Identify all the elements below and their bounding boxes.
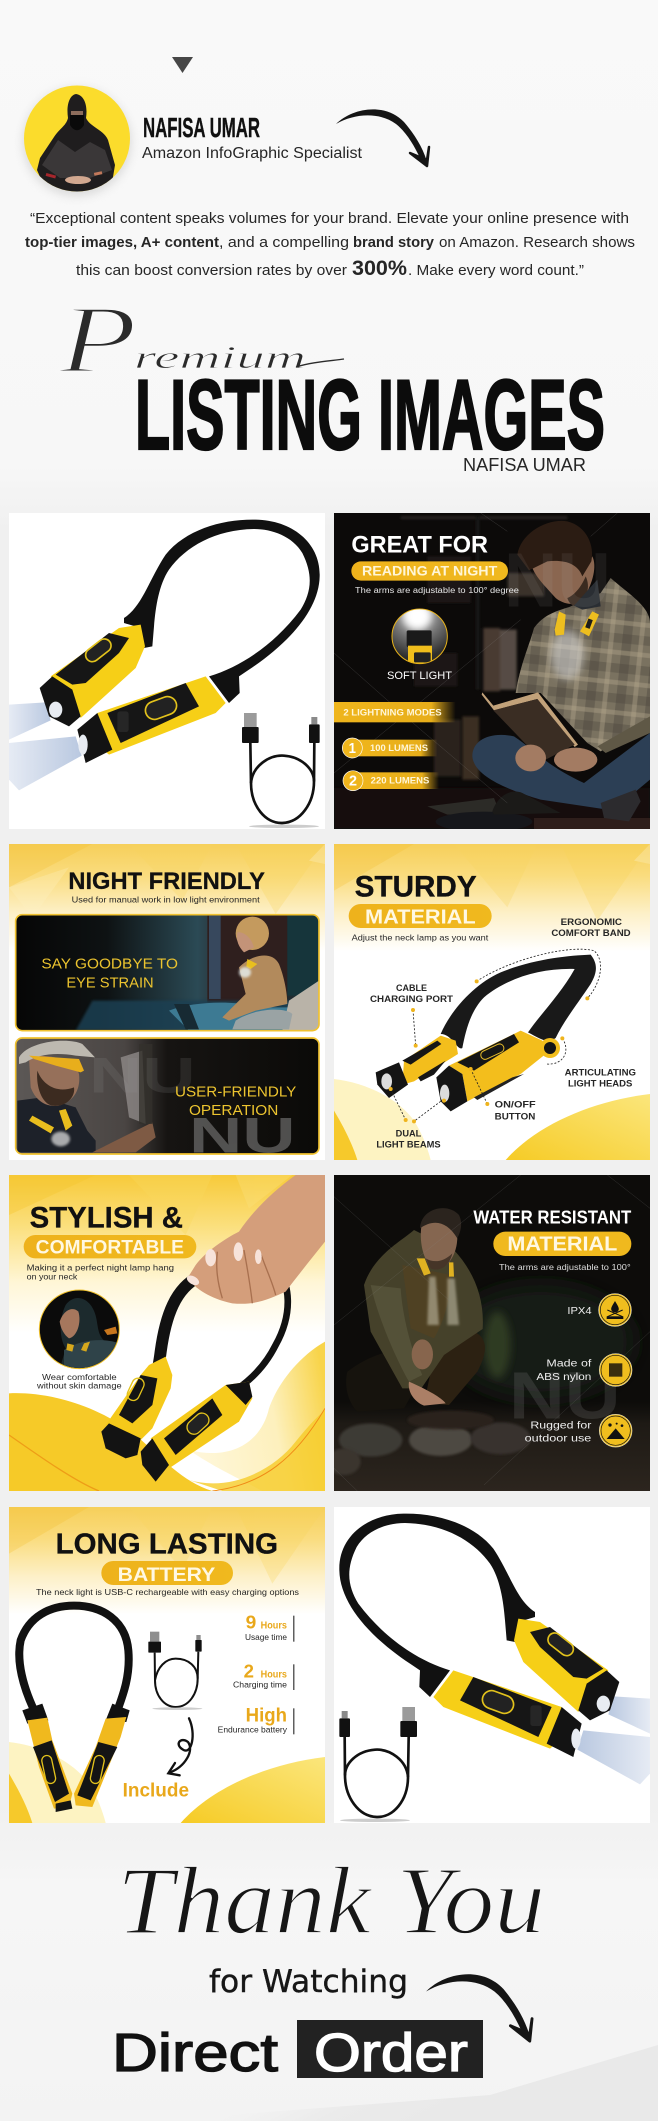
pill: battery xyxy=(101,1561,233,1586)
yellow waves xyxy=(9,1342,325,1491)
script heading: Thank You: Thank You xyxy=(117,1847,545,1954)
strip: lighting modes xyxy=(334,702,456,722)
neck lamp band xyxy=(156,1263,288,1390)
label: soft light: SOFT LIGHT xyxy=(387,670,452,682)
bottom waves xyxy=(334,1079,650,1160)
watermark: NU xyxy=(509,1359,621,1433)
neck lamp xyxy=(339,1514,619,1757)
panel: night friendly xyxy=(9,844,325,1163)
mode 1: 100 lumens xyxy=(342,738,437,758)
panel: product mirrored with cable xyxy=(334,1507,650,1823)
feature: ABS nylon: ABS nylon xyxy=(536,1372,591,1383)
panel: product with cable xyxy=(9,513,325,829)
mode 1: 100 lumens: 100 LUMENS xyxy=(370,743,428,753)
usb cable xyxy=(148,1632,202,1710)
quote paragraph: this can boost conversion rates by over xyxy=(76,262,347,279)
caption: Wear comfortable xyxy=(42,1372,117,1382)
man crouching xyxy=(346,1208,485,1412)
heading: GREAT FOR xyxy=(351,531,488,558)
hand xyxy=(187,1175,325,1304)
feature: rugged outdoor use: Rugged for xyxy=(530,1420,592,1431)
feature: IPX4: IPX4 xyxy=(567,1306,592,1317)
stat: high endurance battery: High xyxy=(246,1706,287,1727)
arrow: curved brush pointing to order xyxy=(426,1974,532,2041)
callout: articulating light heads: LIGHT HEADS xyxy=(568,1079,632,1089)
stat: 2 hours charging time: Hours xyxy=(261,1670,287,1681)
callout leader lines xyxy=(391,949,601,1121)
mode 1: 100 lumens: 1 xyxy=(349,741,356,757)
callout: ergonomic comfort band: ERGONOMIC xyxy=(561,917,623,927)
pill: material: MATERIAL xyxy=(507,1234,617,1256)
card: user-friendly operation: OPERATION xyxy=(189,1103,278,1119)
neck lamp xyxy=(376,955,596,1111)
card: say goodbye to eye strain: EYE STRAIN xyxy=(66,976,154,992)
subtitle: The neck light is USB-C rechargeable with easy charging options xyxy=(36,1587,299,1597)
panel: sturdy material xyxy=(334,844,650,1160)
text: for Watching: for Watching xyxy=(209,1964,408,2000)
callout: on/off button: BUTTON xyxy=(495,1111,535,1121)
stat: 2 hours charging time: Charging time xyxy=(233,1679,287,1689)
feature: ABS nylon: Made of xyxy=(546,1359,592,1370)
pill: material xyxy=(349,904,492,928)
callout: cable charging port: CHARGING PORT xyxy=(370,994,454,1004)
callout: on/off button xyxy=(495,1101,536,1120)
callout: dual light beams: LIGHT BEAMS xyxy=(376,1139,441,1149)
feature: rugged outdoor use: outdoor use xyxy=(525,1434,592,1445)
subtitle: The arms are adjustable to 100° degree xyxy=(355,586,520,595)
triangle marker xyxy=(172,57,193,73)
author avatar xyxy=(23,86,131,196)
rug floor xyxy=(334,788,650,832)
stat: 9 hours usage time: Usage time xyxy=(245,1632,287,1642)
feature: ABS nylon xyxy=(536,1354,632,1386)
mode 2: 220 lumens: 2 xyxy=(349,774,357,790)
quote paragraph: 300% xyxy=(352,257,407,280)
caption xyxy=(36,1372,122,1391)
bottom waves xyxy=(9,1742,325,1823)
panel: great for reading at night xyxy=(334,513,650,832)
light beams xyxy=(9,702,82,790)
card: user-friendly operation xyxy=(16,1038,319,1163)
quote paragraph: “Exceptional content speaks volumes for your brand. Elevate your online presence with xyxy=(30,210,629,227)
feature: rugged outdoor use xyxy=(525,1414,632,1447)
mode 2: 220 lumens: 220 LUMENS xyxy=(371,776,429,786)
quote paragraph: brand story xyxy=(353,234,435,251)
heading: STYLISH & xyxy=(30,1202,183,1235)
panel: long lasting battery xyxy=(9,1507,325,1823)
quote paragraph xyxy=(25,210,635,280)
subtitle: Used for manual work in low light environment xyxy=(72,895,260,905)
mode 2: 220 lumens xyxy=(343,771,439,791)
subtitle: The arms are adjustable to 100° xyxy=(499,1262,631,1272)
script title: Premium xyxy=(58,286,344,393)
heading: LONG LASTING xyxy=(56,1528,278,1560)
card: say goodbye to eye strain xyxy=(16,915,319,1031)
card: say goodbye to eye strain: SAY GOODBYE TO xyxy=(41,957,178,973)
text: Direct: Direct xyxy=(112,2023,278,2083)
subtitle xyxy=(27,1263,174,1281)
panel: stylish and comfortable xyxy=(9,1175,325,1491)
panel: water resistant material xyxy=(327,1175,650,1491)
callout: articulating light heads xyxy=(564,1069,636,1086)
script title: Premium: remium xyxy=(134,339,306,375)
card: user-friendly operation: USER-FRIENDLY xyxy=(175,1084,297,1100)
circle photo: woman wearing lamp xyxy=(39,1290,119,1372)
subtitle: Making it a perfect night lamp hang xyxy=(27,1263,174,1273)
author name: NAFISA UMAR xyxy=(143,112,260,143)
pill: comfortable: COMFORTABLE xyxy=(36,1237,184,1258)
heading: STURDY xyxy=(355,871,477,904)
stat: 9 hours usage time xyxy=(245,1611,294,1642)
pill: reading at night: READING AT NIGHT xyxy=(362,563,498,579)
quote paragraph: top-tier images, A+ content xyxy=(25,234,219,251)
neck lamp xyxy=(40,520,320,763)
callout: dual light beams: DUAL xyxy=(396,1128,422,1138)
usb cable xyxy=(339,1707,417,1822)
callout: dual light beams xyxy=(377,1130,440,1148)
neck lamp front view xyxy=(19,1606,130,1812)
heading: NIGHT FRIENDLY xyxy=(68,868,265,895)
author role: Amazon InfoGraphic Specialist xyxy=(142,145,363,162)
quote paragraph: on Amazon. Research shows xyxy=(439,234,635,251)
watermark: NU xyxy=(504,538,611,623)
stat: 9 hours usage time: Hours xyxy=(261,1620,287,1631)
stat: 9 hours usage time: 9 xyxy=(246,1611,256,1632)
neck lamp grips xyxy=(101,1357,252,1482)
arrow: curved brush pointing to text xyxy=(336,109,429,166)
callout: cable charging port xyxy=(370,984,453,1002)
byline: NAFISA UMAR xyxy=(463,454,586,475)
stat: high endurance battery xyxy=(218,1706,294,1735)
heading: WATER RESISTANT xyxy=(473,1206,632,1227)
caption: without skin damage xyxy=(36,1381,122,1391)
script title: Premium: P xyxy=(58,286,137,393)
card: user-friendly operation: NU xyxy=(189,1107,296,1163)
pill: battery: BATTERY xyxy=(118,1565,215,1586)
quote paragraph: , and a compelling xyxy=(219,234,349,251)
subtitle: Adjust the neck lamp as you want xyxy=(352,933,489,943)
label: include: Include xyxy=(123,1781,189,1802)
stat: 2 hours charging time xyxy=(233,1661,294,1690)
strip: lighting modes: 2 LIGHTNING MODES xyxy=(343,707,442,717)
card: user-friendly operation: NU xyxy=(89,1047,196,1103)
button: Order: Order xyxy=(314,2023,468,2083)
foliage and ground xyxy=(327,1285,650,1491)
feature: IPX4 xyxy=(567,1294,631,1326)
fingernails xyxy=(185,1242,262,1287)
callout: on/off button: ON/OFF xyxy=(495,1100,536,1110)
usb cable xyxy=(242,713,320,828)
callout: ergonomic comfort band xyxy=(552,918,630,936)
subtitle: on your neck xyxy=(27,1271,78,1281)
callout: articulating light heads: ARTICULATING xyxy=(565,1067,636,1077)
man reading xyxy=(472,521,650,821)
background bookshelf xyxy=(401,516,567,780)
arrow: curly arrow to include xyxy=(168,1718,193,1775)
stat: 2 hours charging time: 2 xyxy=(244,1661,254,1682)
pill: material xyxy=(493,1232,631,1256)
callout: ergonomic comfort band: COMFORT BAND xyxy=(551,928,631,938)
stat: high endurance battery: Endurance battery xyxy=(218,1725,288,1735)
quote paragraph: . Make every word count.” xyxy=(408,262,584,279)
pill: material: MATERIAL xyxy=(365,905,476,928)
callout: cable charging port: CABLE xyxy=(396,983,427,993)
icon: soft light circle xyxy=(392,603,447,666)
light beams xyxy=(577,1696,650,1784)
